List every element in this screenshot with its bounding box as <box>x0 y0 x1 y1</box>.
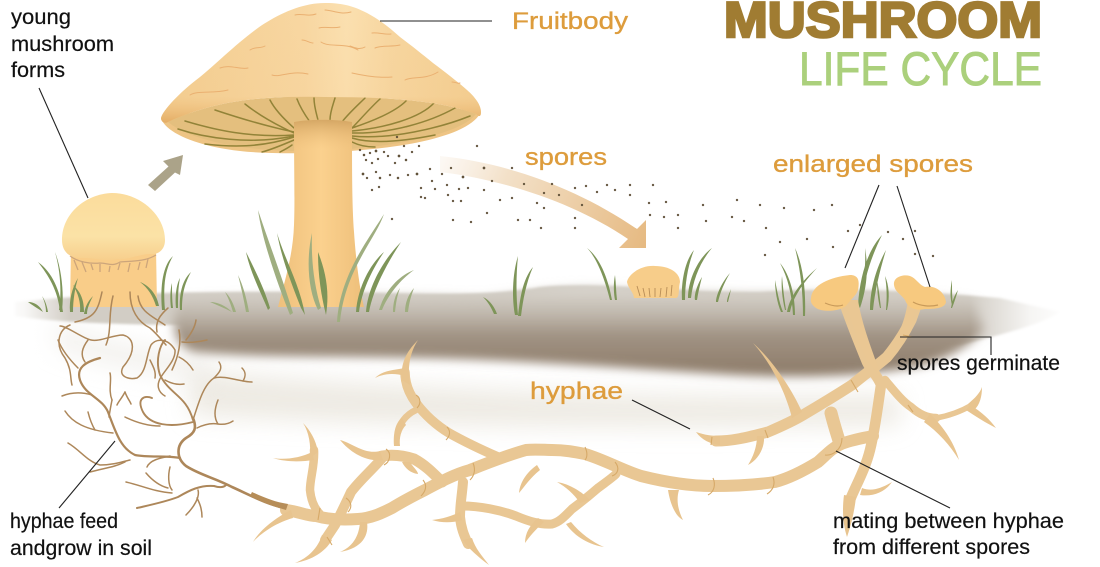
label: fruitbody: Fruitbody <box>512 8 628 35</box>
fruitbody mushroom <box>161 3 481 307</box>
label: young mushroom forms: forms <box>11 58 65 82</box>
label: mating between hyphae <box>833 451 1064 559</box>
fringe on young mushroom <box>70 255 156 272</box>
label: enlarged spores: enlarged spores <box>773 151 973 178</box>
grass at germinating spores <box>775 235 958 316</box>
grey growth arrow <box>148 155 183 191</box>
grass at fruitbody <box>210 210 414 322</box>
stem <box>278 120 364 307</box>
large spores arrow <box>440 156 646 248</box>
label: spores germinate <box>897 337 1060 375</box>
cap <box>161 3 481 123</box>
grass clumps <box>28 252 191 314</box>
label: young mushroom forms: young <box>11 5 71 29</box>
label: hyphae feed and grow in soil: andgrow in soil <box>10 536 152 560</box>
label: hyphae <box>530 378 690 429</box>
young mushroom <box>62 193 165 307</box>
germinating spore caps <box>811 275 946 378</box>
soil layer <box>0 285 1070 427</box>
cap rim <box>161 90 481 153</box>
title: LIFE CYCLE <box>799 42 1042 95</box>
label: hyphae feed and grow in soil: hyphae feed <box>10 509 118 533</box>
title <box>724 0 1042 95</box>
label: hyphae feed and grow in soil <box>10 441 152 560</box>
cap underside with gills <box>168 97 476 152</box>
label: mating between hyphae: mating between hyphae <box>833 509 1064 533</box>
grass mid field <box>483 248 731 316</box>
falling spore dots <box>359 136 934 257</box>
label: enlarged spores <box>773 151 973 287</box>
label: young mushroom forms: mushroom <box>11 32 114 56</box>
label: spores: spores <box>525 144 607 171</box>
thick tan hyphae network <box>250 300 996 565</box>
label: mating between hyphae: from different spores <box>833 535 1030 559</box>
small spore forming on ground <box>627 266 680 298</box>
label: young mushroom forms <box>11 5 114 198</box>
label: spores germinate: spores germinate <box>897 351 1060 375</box>
thin brown hyphae network <box>58 292 286 517</box>
label: hyphae: hyphae <box>530 378 623 405</box>
